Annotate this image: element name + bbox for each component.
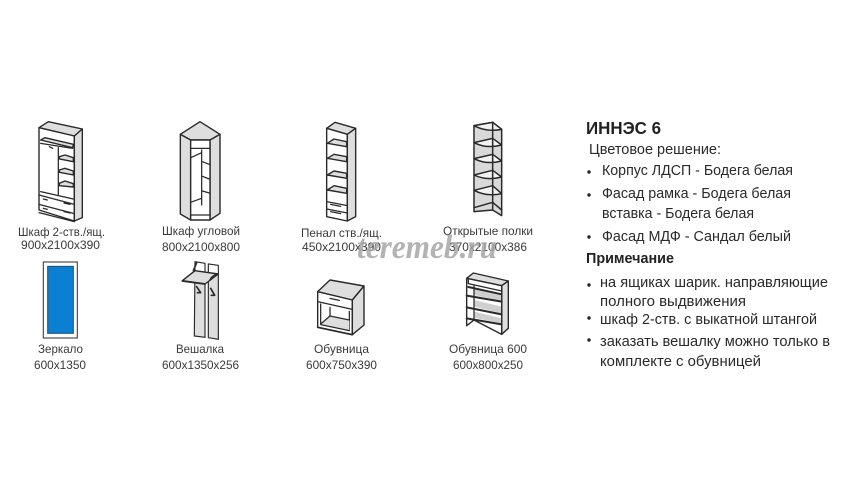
icon: shoe cabinet [318, 280, 364, 335]
caption: wardrobe: Шкаф 2-ств./ящ. [18, 225, 105, 239]
caption: corner wardrobe: 800х2100х800 [162, 240, 240, 254]
caption: narrow cabinet [301, 226, 382, 254]
caption: open shelves: Открытые полки [443, 224, 533, 238]
text block: notes: на ящиках шарик. направляющие [600, 275, 828, 291]
caption: shoe cabinet 600: 600х800х250 [453, 358, 523, 372]
text block: notes: заказать вешалку можно только в [600, 334, 830, 350]
caption: shoe cabinet: Обувница [314, 342, 369, 356]
icon: open corner shelves [474, 122, 502, 216]
icon: mirror [43, 262, 77, 338]
caption: shoe cabinet [306, 342, 377, 372]
caption: wardrobe [18, 225, 105, 252]
caption: narrow cabinet: Пенал ств./ящ. [301, 226, 382, 240]
caption: corner wardrobe: Шкаф угловой [162, 224, 240, 238]
icon: two-door wardrobe with drawers [39, 122, 82, 222]
caption: coat rack: 600х1350х256 [162, 358, 239, 372]
caption: mirror [34, 342, 86, 372]
text block: colour options: вставка - Бодега белая [602, 206, 754, 222]
text block: colour options [587, 142, 793, 245]
text block: notes: полного выдвижения [600, 294, 746, 310]
text block: notes: шкаф 2-ств. с выкатной штангой [600, 312, 817, 328]
caption: corner wardrobe [162, 224, 240, 254]
caption: coat rack [162, 342, 239, 372]
watermark: teremeb.ru [357, 229, 497, 266]
icon: narrow cabinet with drawers [327, 122, 356, 221]
caption: mirror: Зеркало [38, 342, 83, 356]
icon: corner wardrobe [180, 122, 220, 220]
text block: notes [587, 275, 830, 370]
icon: coat rack [182, 262, 218, 339]
subheading: note: Примечание [586, 251, 674, 267]
icon: shoe cabinet 600 [467, 273, 508, 334]
caption: open shelves: 370х2100х386 [449, 240, 527, 254]
caption: mirror: 600х1350 [34, 358, 86, 372]
caption: coat rack: Вешалка [176, 342, 224, 356]
caption: shoe cabinet 600: Обувница 600 [449, 342, 527, 356]
text block: colour options: Фасад МДФ - Сандал белый [602, 229, 791, 245]
caption: shoe cabinet 600 [449, 342, 527, 372]
text block: colour options: Фасад рамка - Бодега белая [602, 186, 791, 202]
heading: ИННЭС 6 [586, 118, 661, 138]
text block: colour options: Корпус ЛДСП - Бодега белая [602, 163, 793, 179]
caption: shoe cabinet: 600х750х390 [306, 358, 377, 372]
caption: narrow cabinet: 450х2100х390 [302, 240, 381, 254]
text block: colour options: Цветовое решение: [589, 142, 721, 158]
caption: wardrobe: 900х2100х390 [21, 238, 100, 252]
caption: open shelves [443, 224, 533, 254]
text block: notes: комплекте с обувницей [600, 354, 761, 370]
